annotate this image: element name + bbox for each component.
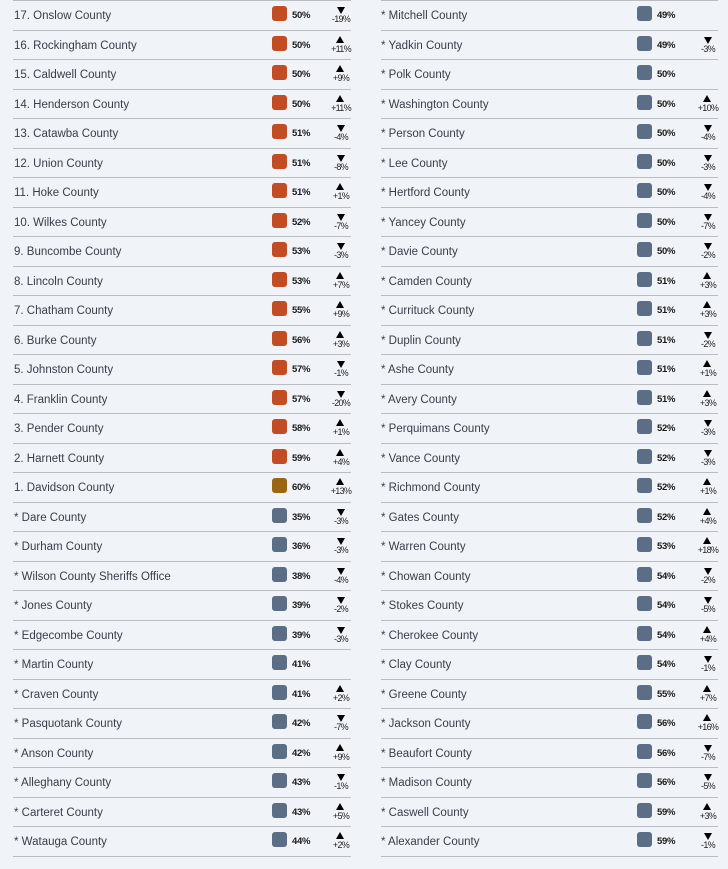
row: Buncombe County [13, 236, 351, 266]
row: Watauga County: +2% [333, 840, 349, 850]
row: Onslow County: -19% [332, 14, 350, 24]
row: Alexander County [381, 826, 718, 856]
row: Avery County [381, 384, 718, 414]
row: Camden County: 51% [657, 276, 675, 287]
row: Perquimans County: 52% [657, 423, 675, 434]
row: Clay County: 54% [657, 659, 675, 670]
row: Caldwell County [13, 59, 351, 89]
row: Carteret County: * Carteret County [14, 807, 103, 819]
row: Yancey County: -7% [701, 221, 715, 231]
row: Johnston County: 5. Johnston County [14, 364, 113, 376]
row: Franklin County: 4. Franklin County [14, 394, 107, 406]
row: Hertford County: 50% [657, 187, 675, 198]
row: Edgecombe County: * Edgecombe County [14, 630, 123, 642]
row: Buncombe County: -3% [334, 250, 348, 260]
row: Franklin County: -20% [332, 398, 350, 408]
row: Henderson County: +11% [331, 103, 351, 113]
row: Edgecombe County: -3% [334, 634, 348, 644]
row: Richmond County: 52% [657, 482, 675, 493]
row: Caswell County [381, 797, 718, 827]
row: Alleghany County: * Alleghany County [14, 777, 111, 789]
row: Mitchell County [381, 0, 718, 30]
row: Person County: -4% [701, 132, 715, 142]
row: Currituck County: 51% [657, 305, 675, 316]
row: Davie County: -2% [701, 250, 715, 260]
row: Burke County: 56% [292, 335, 310, 346]
row: Avery County: * Avery County [381, 394, 457, 406]
row: Cherokee County: +4% [700, 634, 716, 644]
row: Ashe County: 51% [657, 364, 675, 375]
row: Wilson County Sheriffs Office [13, 561, 351, 591]
row: Martin County [13, 649, 351, 679]
row: Greene County: +7% [700, 693, 716, 703]
row: Watauga County [13, 826, 351, 856]
row: Wilkes County [13, 207, 351, 237]
row: Burke County: +3% [333, 339, 349, 349]
row: Davidson County [13, 472, 351, 502]
row: Washington County: 50% [657, 99, 675, 110]
row: Ashe County: * Ashe County [381, 364, 454, 376]
row: Madison County [381, 767, 718, 797]
row: Caldwell County: 50% [292, 69, 310, 80]
row: Greene County: * Greene County [381, 689, 467, 701]
row: Yadkin County: -3% [701, 44, 715, 54]
row: Pasquotank County: 42% [292, 718, 310, 729]
row: Washington County: +10% [698, 103, 718, 113]
row: Chowan County: -2% [701, 575, 715, 585]
row: Rockingham County: 16. Rockingham County [14, 40, 137, 52]
row: Chatham County: +9% [333, 309, 349, 319]
row: Wilson County Sheriffs Office: 38% [292, 571, 310, 582]
row: Caldwell County: +9% [333, 73, 349, 83]
row: Richmond County [381, 472, 718, 502]
row: Catawba County [13, 118, 351, 148]
row: Johnston County: -1% [334, 368, 348, 378]
row: Davie County: 50% [657, 246, 675, 257]
row: Chatham County: 55% [292, 305, 310, 316]
row: Craven County: * Craven County [14, 689, 98, 701]
row: Lee County: * Lee County [381, 158, 448, 170]
row: Alexander County: -1% [701, 840, 715, 850]
row: Davidson County: 60% [292, 482, 310, 493]
row: Wilkes County: 52% [292, 217, 310, 228]
row: Henderson County: 50% [292, 99, 310, 110]
row: Caswell County: * Caswell County [381, 807, 469, 819]
row: Henderson County [13, 89, 351, 119]
row: Stokes County: 54% [657, 600, 675, 611]
row: Johnston County [13, 354, 351, 384]
row: Harnett County: +4% [333, 457, 349, 467]
row: Caswell County: +3% [700, 811, 716, 821]
row: Gates County [381, 502, 718, 532]
row: Martin County: * Martin County [14, 659, 93, 671]
row: Lincoln County: +7% [333, 280, 349, 290]
row: Polk County: * Polk County [381, 69, 451, 81]
row: Beaufort County: 56% [657, 748, 675, 759]
row: Vance County: * Vance County [381, 453, 460, 465]
row: Richmond County: +1% [700, 486, 716, 496]
row: Jackson County: +16% [698, 722, 718, 732]
row: Franklin County: 57% [292, 394, 310, 405]
row: Lincoln County: 8. Lincoln County [14, 276, 103, 288]
row: Avery County: 51% [657, 394, 675, 405]
row: Dare County: 35% [292, 512, 310, 523]
row: Hertford County [381, 177, 718, 207]
row: Rockingham County: 50% [292, 40, 310, 51]
row: Vance County: 52% [657, 453, 675, 464]
row: Vance County: -3% [701, 457, 715, 467]
row: Davie County: * Davie County [381, 246, 458, 258]
row: Clay County: * Clay County [381, 659, 451, 671]
row: Stokes County: -5% [701, 604, 715, 614]
row: Dare County [13, 502, 351, 532]
row: Pender County: 3. Pender County [14, 423, 104, 435]
row: Avery County: +3% [700, 398, 716, 408]
row: Burke County [13, 325, 351, 355]
row: Union County: -8% [334, 162, 348, 172]
row: Madison County: 56% [657, 777, 675, 788]
row: Currituck County [381, 295, 718, 325]
row: Durham County [13, 531, 351, 561]
row: Onslow County: 17. Onslow County [14, 10, 111, 22]
row: Alleghany County: 43% [292, 777, 310, 788]
row: Camden County: * Camden County [381, 276, 472, 288]
row: Catawba County: 51% [292, 128, 310, 139]
row: Burke County: 6. Burke County [14, 335, 96, 347]
row: Chatham County [13, 295, 351, 325]
row: Dare County: -3% [334, 516, 348, 526]
row: Person County [381, 118, 718, 148]
row: Person County: * Person County [381, 128, 465, 140]
row: Harnett County: 2. Harnett County [14, 453, 104, 465]
row: Vance County [381, 443, 718, 473]
row: Alexander County: * Alexander County [381, 836, 479, 848]
row: Anson County: * Anson County [14, 748, 93, 760]
row: Wilkes County: 10. Wilkes County [14, 217, 107, 229]
row: Richmond County: * Richmond County [381, 482, 480, 494]
row: Rockingham County: +11% [331, 44, 351, 54]
row: Stokes County [381, 590, 718, 620]
row: Onslow County: 50% [292, 10, 310, 21]
row: Edgecombe County [13, 620, 351, 650]
row: Perquimans County: -3% [701, 427, 715, 437]
row: Pasquotank County: -7% [334, 722, 348, 732]
row: Craven County: 41% [292, 689, 310, 700]
row: Hertford County: -4% [701, 191, 715, 201]
row: Alleghany County: -1% [334, 781, 348, 791]
row: Duplin County: -2% [701, 339, 715, 349]
row: Watauga County: * Watauga County [14, 836, 107, 848]
row: Polk County: 50% [657, 69, 675, 80]
row: Duplin County [381, 325, 718, 355]
row: Greene County: 55% [657, 689, 675, 700]
row: Davidson County: 1. Davidson County [14, 482, 114, 494]
row: Jackson County [381, 708, 718, 738]
row: Franklin County [13, 384, 351, 414]
row: Wilson County Sheriffs Office: -4% [334, 575, 348, 585]
row: Carteret County: 43% [292, 807, 310, 818]
row: Mitchell County: 49% [657, 10, 675, 21]
row: Warren County [381, 531, 718, 561]
row: Martin County: 41% [292, 659, 310, 670]
row: Greene County [381, 679, 718, 709]
row: Clay County: -1% [701, 663, 715, 673]
row: Lee County: -3% [701, 162, 715, 172]
row: Carteret County: +5% [333, 811, 349, 821]
panel: left county column [13, 0, 352, 857]
row: Gates County: 52% [657, 512, 675, 523]
row: Lincoln County [13, 266, 351, 296]
row: Caldwell County: 15. Caldwell County [14, 69, 116, 81]
row: Duplin County: 51% [657, 335, 675, 346]
row: Stokes County: * Stokes County [381, 600, 463, 612]
row: Davidson County: +13% [331, 486, 351, 496]
row: Camden County: +3% [700, 280, 716, 290]
row: Edgecombe County: 39% [292, 630, 310, 641]
row: Warren County: 53% [657, 541, 675, 552]
panel: right county column [381, 0, 719, 857]
row: Carteret County [13, 797, 351, 827]
row: Pender County: +1% [333, 427, 349, 437]
row: Perquimans County: * Perquimans County [381, 423, 490, 435]
row: Madison County: * Madison County [381, 777, 472, 789]
row: Craven County [13, 679, 351, 709]
row: Yadkin County [381, 30, 718, 60]
row: Pender County [13, 413, 351, 443]
row: Durham County: -3% [334, 545, 348, 555]
row: Perquimans County [381, 413, 718, 443]
row: Jones County: 39% [292, 600, 310, 611]
row: Cherokee County: 54% [657, 630, 675, 641]
row: Alexander County: 59% [657, 836, 675, 847]
row: Jones County [13, 590, 351, 620]
row: Currituck County: * Currituck County [381, 305, 474, 317]
row: Chatham County: 7. Chatham County [14, 305, 113, 317]
row: Anson County: 42% [292, 748, 310, 759]
row: Yadkin County: 49% [657, 40, 675, 51]
row: Hoke County: +1% [333, 191, 349, 201]
row: Lee County [381, 148, 718, 178]
row: Warren County: +18% [698, 545, 718, 555]
row: Pender County: 58% [292, 423, 310, 434]
row: Pasquotank County [13, 708, 351, 738]
row: Beaufort County: -7% [701, 752, 715, 762]
row: Ashe County: +1% [700, 368, 716, 378]
row: Davie County [381, 236, 718, 266]
row: Duplin County: * Duplin County [381, 335, 461, 347]
row: Yancey County [381, 207, 718, 237]
row: Chowan County: 54% [657, 571, 675, 582]
row: Union County: 51% [292, 158, 310, 169]
row: Washington County [381, 89, 718, 119]
row: Hoke County: 51% [292, 187, 310, 198]
row: Craven County: +2% [333, 693, 349, 703]
row: Clay County [381, 649, 718, 679]
row: Watauga County: 44% [292, 836, 310, 847]
row: Jones County: * Jones County [14, 600, 92, 612]
row: Beaufort County: * Beaufort County [381, 748, 472, 760]
row: Catawba County: 13. Catawba County [14, 128, 118, 140]
row: Wilson County Sheriffs Office: * Wilson County Sheriffs Office [14, 571, 171, 583]
row: Ashe County [381, 354, 718, 384]
row: Lee County: 50% [657, 158, 675, 169]
row: Jackson County: * Jackson County [381, 718, 470, 730]
row: Jones County: -2% [334, 604, 348, 614]
row: Cherokee County [381, 620, 718, 650]
row: Yancey County: 50% [657, 217, 675, 228]
row: Yadkin County: * Yadkin County [381, 40, 462, 52]
row: Jackson County: 56% [657, 718, 675, 729]
row: Johnston County: 57% [292, 364, 310, 375]
row: Hertford County: * Hertford County [381, 187, 470, 199]
row: Wilkes County: -7% [334, 221, 348, 231]
row: Union County [13, 148, 351, 178]
row: Anson County [13, 738, 351, 768]
row: Buncombe County: 9. Buncombe County [14, 246, 121, 258]
row: Rockingham County [13, 30, 351, 60]
row: Polk County [381, 59, 718, 89]
row: Lincoln County: 53% [292, 276, 310, 287]
row: Anson County: +9% [333, 752, 349, 762]
row: Currituck County: +3% [700, 309, 716, 319]
row: Person County: 50% [657, 128, 675, 139]
row: Gates County: * Gates County [381, 512, 459, 524]
row: Madison County: -5% [701, 781, 715, 791]
row: Chowan County [381, 561, 718, 591]
row: Hoke County: 11. Hoke County [14, 187, 99, 199]
row: Yancey County: * Yancey County [381, 217, 466, 229]
row: Harnett County [13, 443, 351, 473]
row: Hoke County [13, 177, 351, 207]
row: Pasquotank County: * Pasquotank County [14, 718, 122, 730]
row: Durham County: * Durham County [14, 541, 102, 553]
row: Dare County: * Dare County [14, 512, 86, 524]
row: Mitchell County: * Mitchell County [381, 10, 467, 22]
row: Buncombe County: 53% [292, 246, 310, 257]
row: Onslow County [13, 0, 351, 30]
row: Chowan County: * Chowan County [381, 571, 470, 583]
row: Gates County: +4% [700, 516, 716, 526]
row: Alleghany County [13, 767, 351, 797]
row: Washington County: * Washington County [381, 99, 489, 111]
row: Beaufort County [381, 738, 718, 768]
row: Catawba County: -4% [334, 132, 348, 142]
row: Henderson County: 14. Henderson County [14, 99, 129, 111]
row: Durham County: 36% [292, 541, 310, 552]
row: Warren County: * Warren County [381, 541, 466, 553]
row: Camden County [381, 266, 718, 296]
row: Harnett County: 59% [292, 453, 310, 464]
row: Caswell County: 59% [657, 807, 675, 818]
row: Cherokee County: * Cherokee County [381, 630, 478, 642]
row: Union County: 12. Union County [14, 158, 103, 170]
